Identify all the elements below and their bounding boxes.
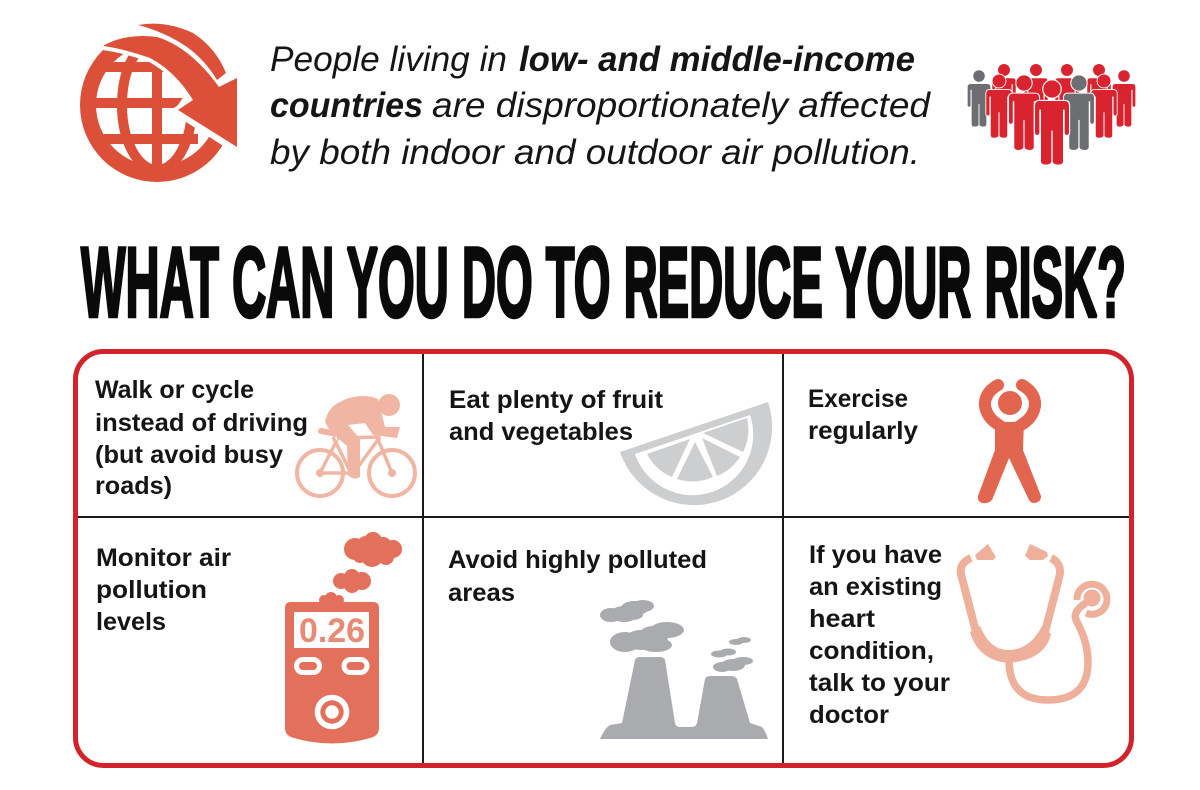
intro statement: low- and middle-income <box>519 40 915 79</box>
intro statement <box>270 40 932 172</box>
tip: heart condition: doctor <box>809 701 889 729</box>
tip: heart condition: an existing <box>809 573 942 601</box>
tip: avoid polluted areas <box>448 546 707 607</box>
tip: eat fruit and vegetables <box>449 386 664 446</box>
tip: heart condition: heart <box>809 605 876 633</box>
intro statement: countries <box>270 86 423 125</box>
tip: heart condition: condition, <box>809 637 934 665</box>
icon: air quality monitor: 0.26 <box>299 612 365 650</box>
tip: avoid polluted areas: Avoid highly polluted <box>448 546 707 574</box>
tip: walk or cycle: instead of driving <box>95 409 308 437</box>
tip: monitor air pollution: levels <box>96 608 166 636</box>
icon: air quality monitor <box>285 532 402 744</box>
intro statement: People living in <box>270 40 507 79</box>
tip: exercise: Exercise <box>808 385 908 413</box>
tip: walk or cycle <box>95 376 308 500</box>
tip: walk or cycle: Walk or cycle <box>95 376 254 404</box>
tip: monitor air pollution <box>96 544 231 636</box>
tip: exercise: regularly <box>808 417 918 445</box>
tip: heart condition: If you have <box>809 541 942 569</box>
icon: globe with downward arrow <box>80 24 237 182</box>
intro statement: are disproportionately affected <box>432 86 932 125</box>
icon: citrus slice <box>620 402 772 505</box>
icon: crowd of people <box>968 64 1135 165</box>
tip: exercise <box>808 385 918 445</box>
tip: eat fruit and vegetables: Eat plenty of fruit <box>449 386 664 414</box>
tip: walk or cycle: (but avoid busy <box>95 441 283 469</box>
icon: cyclist <box>297 394 415 496</box>
icon: stethoscope <box>961 544 1107 700</box>
tip: eat fruit and vegetables: and vegetables <box>449 418 633 446</box>
panel: risk reduction tips grid <box>76 352 1132 766</box>
icon: factory cooling towers with smoke <box>600 600 768 739</box>
tip: avoid polluted areas: areas <box>448 579 515 607</box>
tip: heart condition <box>809 541 950 729</box>
icon: person exercising <box>978 385 1041 503</box>
intro statement: by both indoor and outdoor air pollution. <box>270 133 920 172</box>
tip: monitor air pollution: Monitor air <box>96 544 231 572</box>
tip: monitor air pollution: pollution <box>96 576 207 604</box>
tip: heart condition: talk to your <box>809 669 950 697</box>
tip: walk or cycle: roads) <box>95 472 172 500</box>
